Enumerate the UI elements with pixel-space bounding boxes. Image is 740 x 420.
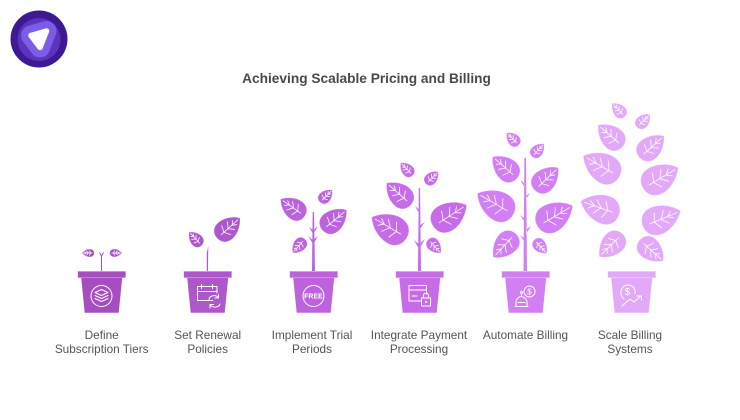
plant 3: Implement Trial Periods — [275, 186, 354, 313]
stem — [308, 212, 318, 271]
title: Achieving Scalable Pricing and Billing — [242, 71, 491, 86]
label: integrate payment processing: Processing — [390, 342, 448, 356]
icon: robot with dollar coin: $ — [527, 288, 532, 296]
logo — [10, 10, 68, 68]
plant 2: Set Renewal Policies — [184, 210, 247, 313]
label: set renewal policies: Policies — [187, 342, 228, 356]
leaves — [275, 186, 354, 257]
pot — [290, 271, 338, 313]
leaves — [576, 99, 686, 269]
plant 1: Define Subscription Tiers — [78, 249, 126, 313]
pot — [608, 271, 656, 313]
pot — [78, 271, 126, 313]
labels — [55, 328, 662, 356]
icon: dollar coin with growth arrow — [621, 285, 642, 306]
pot — [502, 271, 550, 313]
label: scale billing systems: Scale Billing — [598, 328, 662, 342]
leaves — [470, 128, 580, 265]
leaves — [184, 210, 247, 250]
pot — [184, 271, 232, 313]
pot — [396, 271, 444, 313]
stem — [207, 246, 208, 271]
label: automate billing: Automate Billing — [483, 328, 568, 342]
stem — [414, 188, 425, 271]
icon: robot with dollar coin — [515, 286, 535, 306]
plant 4: Integrate Payment Processing — [364, 159, 474, 313]
plant 5: Automate Billing — [470, 128, 580, 313]
label: set renewal policies: Set Renewal — [174, 328, 241, 342]
label: scale billing systems: Systems — [607, 342, 653, 356]
leaves — [364, 159, 474, 257]
icon: stacked layers — [91, 286, 112, 306]
label: integrate payment processing: Integrate Payment — [371, 328, 468, 342]
seedling leaves — [82, 249, 122, 257]
label: implement trial periods: Implement Trial — [272, 328, 352, 342]
icon: dollar coin with growth arrow: $ — [625, 287, 631, 298]
stem — [520, 158, 531, 271]
label: define subscription tiers: Define — [85, 328, 119, 342]
icon: calendar with renew arrows — [198, 284, 220, 308]
icon: payment card with lock — [409, 286, 430, 306]
stem — [100, 252, 104, 271]
label: implement trial periods: Periods — [292, 342, 332, 356]
plant 6: Scale Billing Systems — [576, 99, 686, 313]
icon: free badge: FREE — [304, 294, 323, 301]
label: define subscription tiers: Subscription Tiers — [55, 342, 149, 356]
